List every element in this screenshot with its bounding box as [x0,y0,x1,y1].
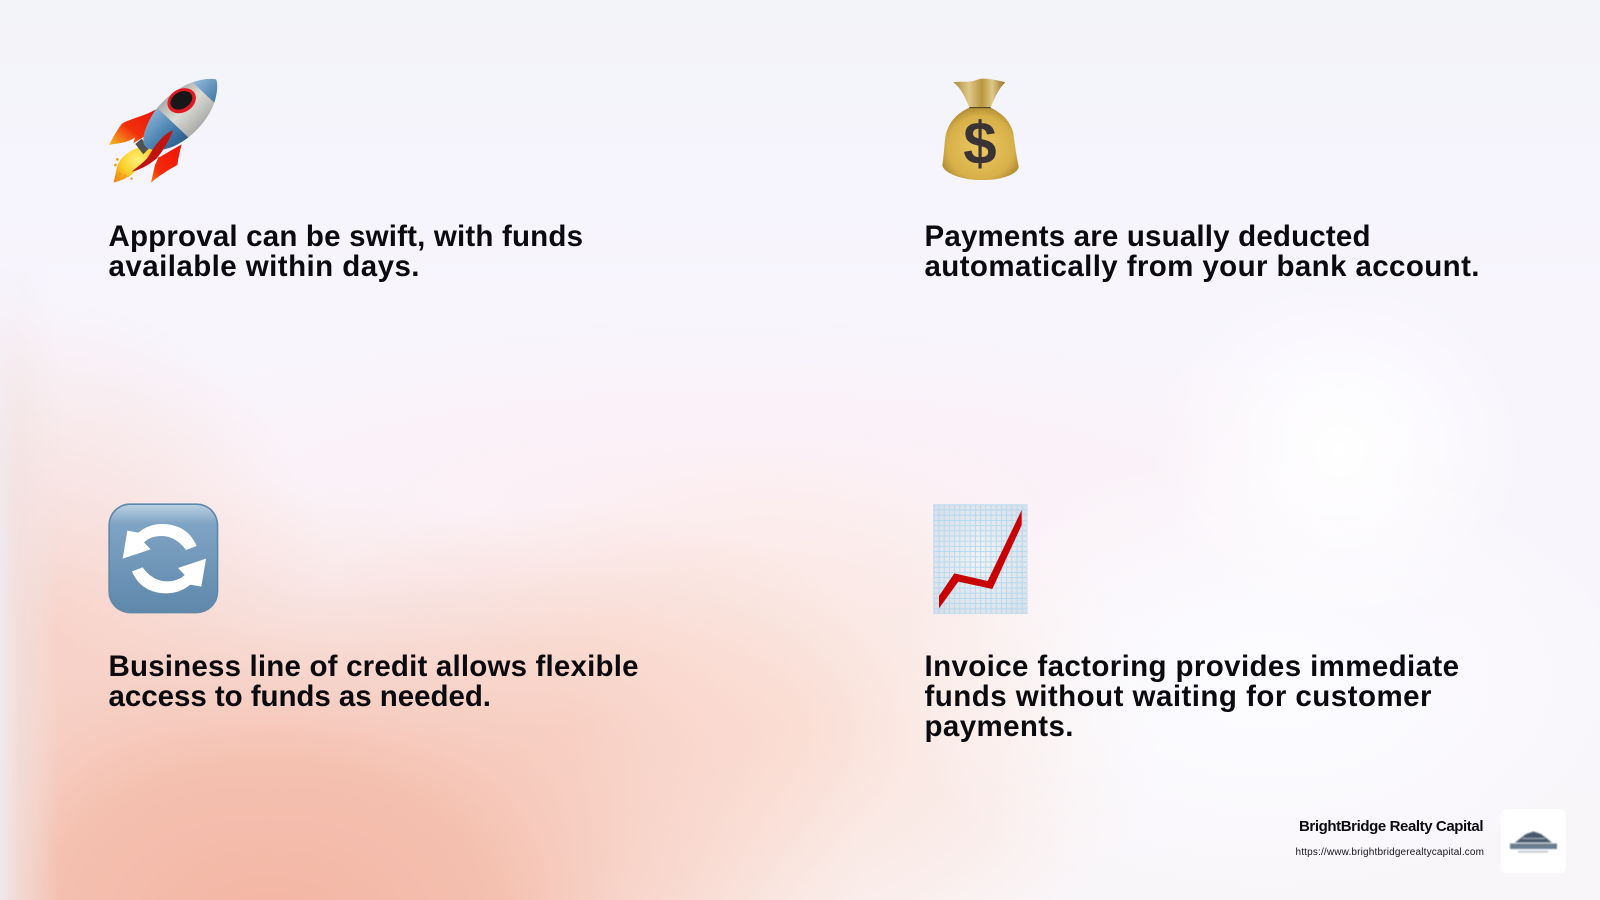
icon: rocket [109,78,218,183]
text: invoice factoring: funds without waiting for customer [924,680,1432,713]
text: approval: Approval can be swift, with funds [108,220,583,253]
text: invoice factoring: payments. [924,710,1074,743]
icon: money bag: $ [963,110,997,177]
logo [1501,809,1566,874]
icon: money bag [942,79,1019,180]
text: line of credit [108,650,638,713]
icon: refresh arrows [108,503,218,613]
text: approval [108,220,583,283]
icon: rising chart [933,504,1027,614]
brand url: https://www.brightbridgerealtycapital.com [1296,847,1484,858]
text: payments: Payments are usually deducted [924,220,1370,253]
brand name: BrightBridge Realty Capital [1299,818,1484,835]
text: invoice factoring: Invoice factoring provides immediate [924,650,1459,683]
text: approval: available within days. [108,250,420,283]
text: payments [924,220,1480,283]
text: line of credit: Business line of credit allows flexible [108,650,638,683]
background gradient [0,333,1445,900]
text: line of credit: access to funds as needed. [108,680,491,713]
text: invoice factoring [924,650,1459,743]
text: payments: automatically from your bank account. [924,250,1480,283]
